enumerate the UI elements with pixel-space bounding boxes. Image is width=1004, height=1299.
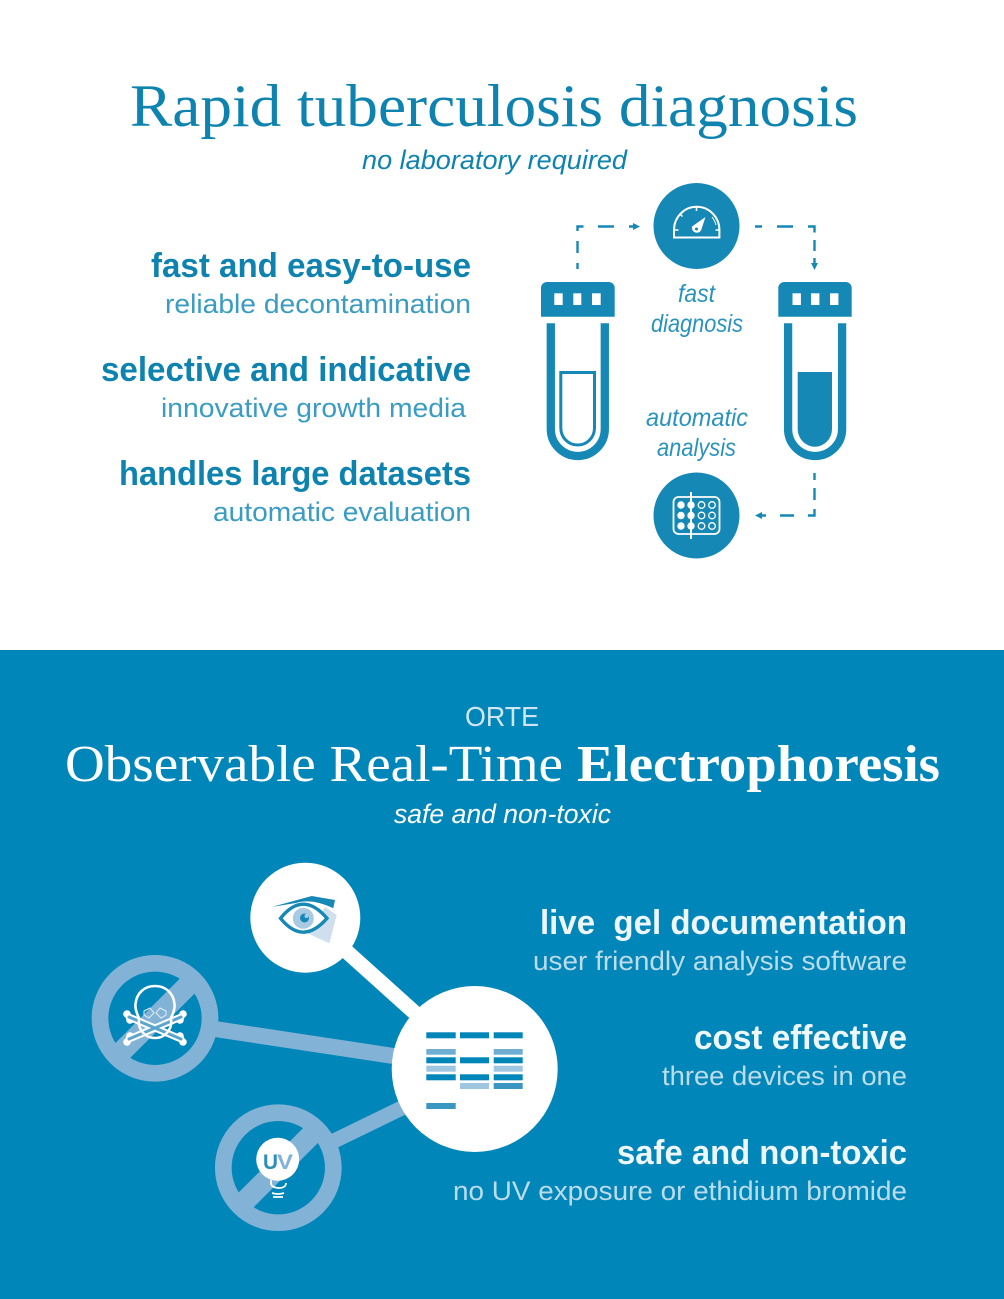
feature 2 heading: selective and indicative [101, 351, 471, 389]
feature list: electrophoresis [453, 904, 907, 1206]
icon: gel electrophoresis [392, 986, 558, 1152]
feature 1 heading: fast and easy-to-use [151, 247, 471, 285]
section title [65, 736, 940, 793]
label: fast diagnosis: fast [678, 280, 716, 308]
feature list: tuberculosis [101, 247, 471, 527]
feature 3 detail: no UV exposure or ethidium bromide [453, 1176, 907, 1206]
icon: speedometer [654, 183, 740, 269]
feature 1 detail: reliable decontamination [165, 289, 471, 319]
label: fast diagnosis: diagnosis [651, 310, 743, 338]
label: automatic analysis: analysis [657, 434, 736, 462]
acronym label: ORTE [465, 701, 539, 732]
feature 1 detail: user friendly analysis software [533, 946, 907, 976]
title: Rapid tuberculosis diagnosis [130, 73, 858, 139]
section title: Observable Real-Time [65, 736, 563, 793]
feature 2 heading: cost effective [694, 1019, 907, 1057]
panel: rapid tuberculosis diagnosis [101, 73, 858, 558]
feature 3 heading: handles large datasets [119, 455, 471, 493]
connector: skull to gel [215, 1029, 400, 1057]
icon: well plate [654, 472, 740, 558]
feature 2 detail: three devices in one [662, 1061, 907, 1091]
subtitle: no laboratory required [362, 145, 628, 175]
arrow: right tube to plate [755, 473, 814, 519]
label: automatic analysis: automatic [646, 404, 748, 432]
icon: no uv bulb: V [277, 1151, 293, 1174]
feature 1 heading: live gel documentation [540, 904, 907, 942]
feature 3 heading: safe and non-toxic [617, 1134, 907, 1172]
icon: empty test tube [541, 282, 615, 456]
label: fast diagnosis [651, 280, 743, 338]
arrow: left tube to gauge [578, 223, 640, 269]
icon: no toxic skull [100, 963, 210, 1073]
label: automatic analysis [646, 404, 748, 462]
connector: eye to gel [345, 950, 425, 1022]
section title: Electrophoresis [577, 736, 940, 793]
icon: eye [250, 863, 360, 973]
icon: no uv bulb: U [263, 1151, 278, 1174]
icon: filled test tube [778, 282, 852, 456]
connector: uv to gel [334, 1104, 410, 1141]
panel: observable real-time electrophoresis [0, 650, 1004, 1299]
section subtitle: safe and non-toxic [394, 799, 611, 829]
arrow: gauge to right tube [755, 226, 818, 270]
feature 3 detail: automatic evaluation [213, 497, 471, 527]
feature 2 detail: innovative growth media [161, 393, 467, 423]
icon: no uv bulb [223, 1113, 333, 1223]
